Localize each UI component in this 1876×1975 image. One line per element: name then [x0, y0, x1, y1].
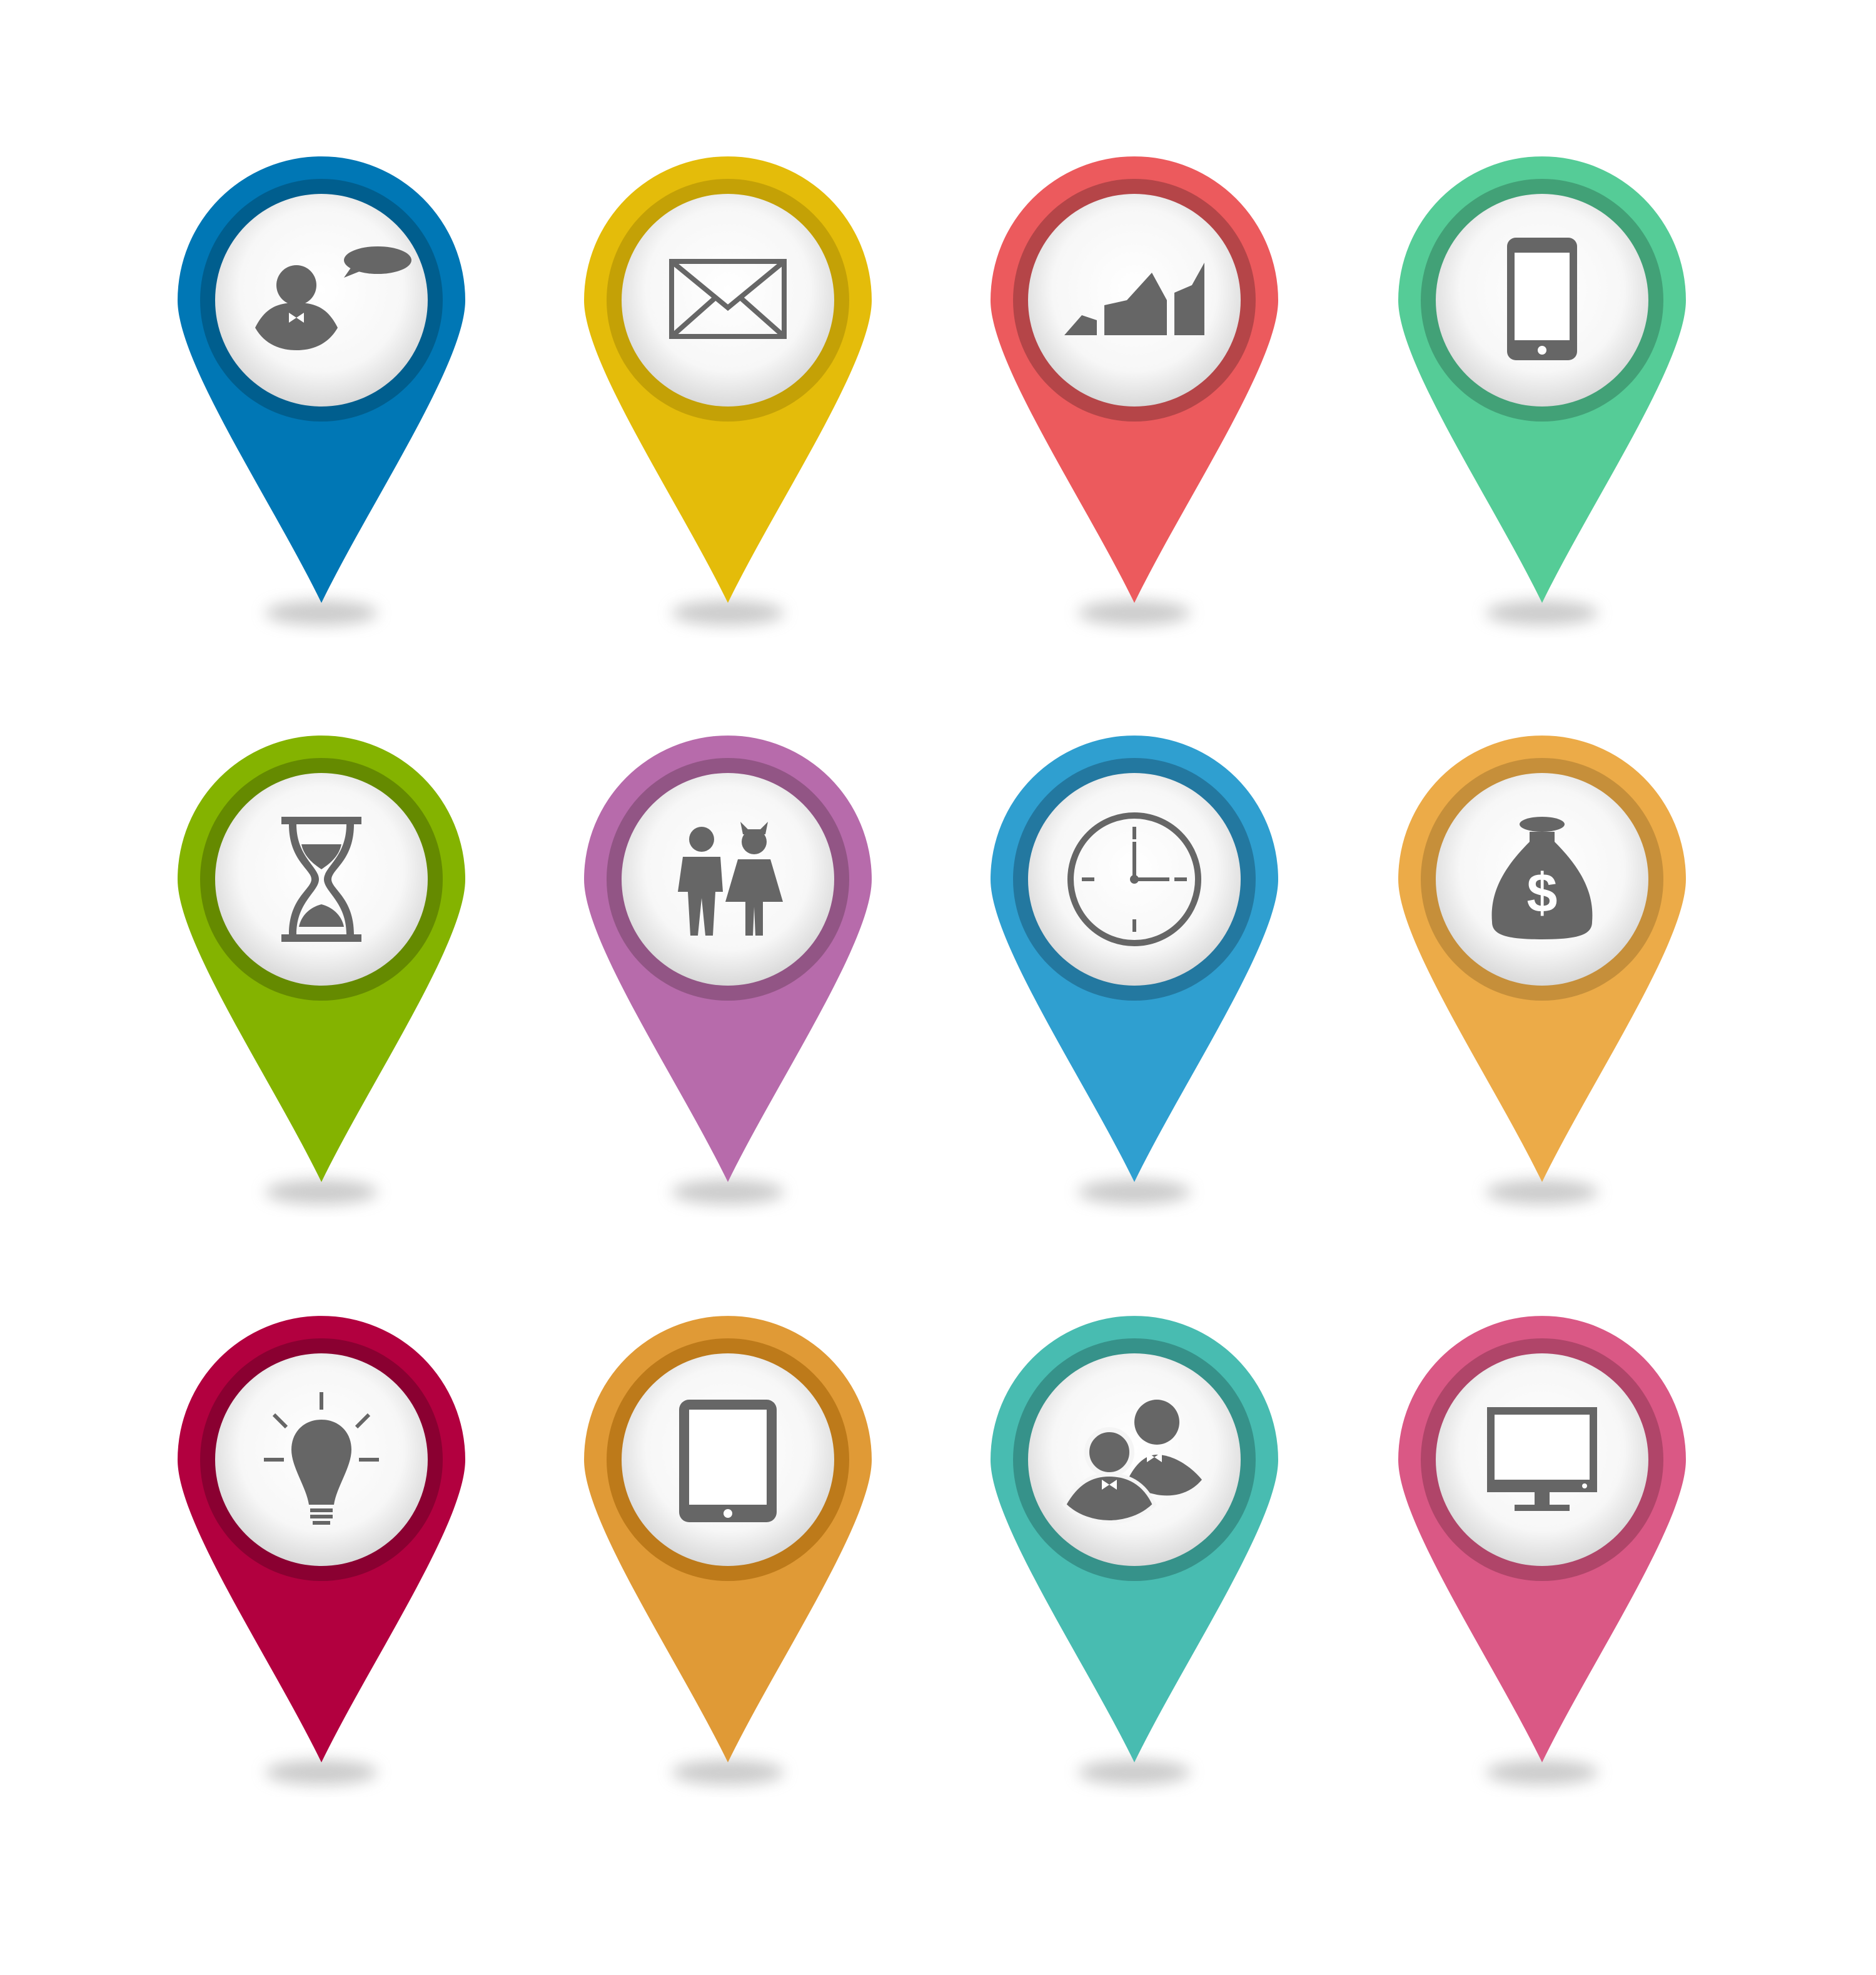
pin: envelope (yellow) — [584, 156, 872, 625]
icon: two people — [1064, 1400, 1202, 1522]
icon: money bag — [1492, 817, 1592, 939]
icon: man and woman — [678, 822, 783, 936]
pin: couple (purple) — [584, 735, 872, 1205]
icon: hourglass — [281, 817, 361, 942]
pin: two people (teal) — [991, 1316, 1278, 1785]
pin: tablet (orange) — [584, 1316, 872, 1785]
icon: person with speech bubble — [255, 246, 411, 350]
pin: person speech (blue) — [178, 156, 465, 625]
icon: envelope — [672, 261, 784, 336]
icon: money bag: $ — [1527, 862, 1557, 924]
icon: area chart — [1064, 263, 1204, 335]
pin: chart (red) — [991, 156, 1278, 625]
pin: hourglass (lime) — [178, 735, 465, 1205]
pin: phone (green) — [1398, 156, 1686, 625]
pin: monitor (pink) — [1398, 1316, 1686, 1785]
icon: clock — [1071, 816, 1198, 943]
icon: tablet — [679, 1400, 777, 1522]
icon: light bulb — [264, 1392, 379, 1525]
icon: monitor — [1487, 1407, 1597, 1511]
icon: mobile phone — [1507, 238, 1577, 360]
pin: clock (sky blue) — [991, 735, 1278, 1205]
pin: money bag (orange) — [1398, 735, 1686, 1205]
pin: light bulb (crimson) — [178, 1316, 465, 1785]
